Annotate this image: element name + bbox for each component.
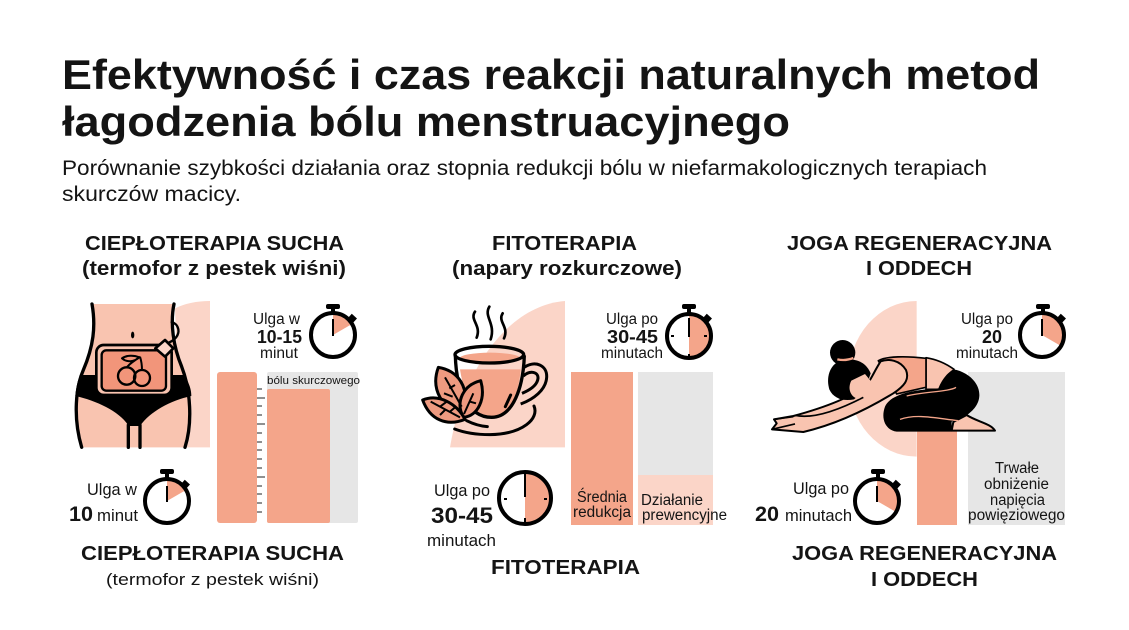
panel: dry heat therapy <box>69 233 360 589</box>
relief label 30-45 minutes lower: 30-45 <box>431 503 493 528</box>
icon: abdomen with cherry-stone heat pad <box>75 301 210 447</box>
relief label 10-15 minutes: minut <box>260 345 299 362</box>
subtitle <box>62 157 987 206</box>
relief label 20 minutes lower: 20 <box>755 503 779 526</box>
bar chart: dry heat pain reduction <box>217 372 360 523</box>
icon: woman in child's pose <box>772 301 995 457</box>
bar chart: yoga tension reduction: obniżenie <box>984 476 1049 493</box>
relief label 30-45 minutes upper: 30-45 <box>607 327 658 347</box>
relief label 20 minutes upper: 20 <box>982 327 1002 347</box>
title: łagodzenia bólu menstruacyjnego <box>62 98 790 145</box>
footer label: phytotherapy: FITOTERAPIA <box>491 557 640 579</box>
subtitle: Porównanie szybkości działania oraz stopnia redukcji bólu w niefarmakologicznych terapiach <box>62 157 987 180</box>
heading: phytotherapy: FITOTERAPIA <box>492 233 637 255</box>
bar chart: phytotherapy reduction and prevention: prewencyjne <box>642 507 727 524</box>
footer label: dry heat therapy: (termofor z pestek wiśni) <box>106 570 319 589</box>
footer label: dry heat therapy: CIEPŁOTERAPIA SUCHA <box>81 543 344 565</box>
relief label 20 minutes lower: minutach <box>785 506 852 525</box>
relief label 10 minutes: minut <box>97 506 138 525</box>
bar chart: phytotherapy reduction and prevention <box>571 372 727 525</box>
relief label 30-45 minutes lower <box>427 481 496 550</box>
bar chart: yoga tension reduction: Trwałe <box>995 460 1039 477</box>
heading: phytotherapy: (napary rozkurczowe) <box>452 258 682 280</box>
relief label 10-15 minutes: 10-15 <box>257 327 302 347</box>
relief label 20 minutes lower: Ulga po <box>793 479 849 498</box>
bar chart: yoga tension reduction: napięcia <box>990 492 1045 509</box>
bar chart: phytotherapy reduction and prevention: redukcja <box>573 504 631 521</box>
relief label 10-15 minutes: Ulga w <box>253 311 301 328</box>
heading: dry heat therapy: CIEPŁOTERAPIA SUCHA <box>85 233 344 255</box>
footer label: restorative yoga: I ODDECH <box>871 569 978 591</box>
relief label 10 minutes: Ulga w <box>87 480 138 499</box>
bar chart: yoga tension reduction: powięziowego <box>968 507 1065 524</box>
relief label 10 minutes: 10 <box>69 503 93 526</box>
heading: restorative yoga <box>787 233 1052 280</box>
relief label 20 minutes upper: minutach <box>956 345 1018 362</box>
footer label: restorative yoga: JOGA REGENERACYJNA <box>792 543 1057 565</box>
relief label 10 minutes <box>69 480 138 526</box>
subtitle: skurczów macicy. <box>62 183 241 206</box>
title: Efektywność i czas reakcji naturalnych metod <box>62 51 1040 98</box>
relief label 30-45 minutes upper: minutach <box>601 345 663 362</box>
bar chart: phytotherapy reduction and prevention: Średnia <box>577 488 627 506</box>
icon: stopwatch 30-45 minutes <box>667 304 712 358</box>
bar chart: phytotherapy reduction and prevention: Działanie <box>641 492 703 509</box>
footer label: dry heat therapy <box>81 543 344 589</box>
relief label 10-15 minutes <box>253 311 302 362</box>
heading: restorative yoga: JOGA REGENERACYJNA <box>787 233 1052 255</box>
relief label 20 minutes upper <box>956 311 1018 362</box>
icon: stopwatch 20 minutes upper <box>1020 304 1066 357</box>
heading: restorative yoga: I ODDECH <box>866 258 972 280</box>
icon: clock 30-45 minutes <box>499 472 551 524</box>
relief label 30-45 minutes upper <box>601 311 663 362</box>
relief label 30-45 minutes upper: Ulga po <box>606 311 658 328</box>
icon: stopwatch 10-15 minutes <box>311 304 357 357</box>
relief label 20 minutes lower <box>755 479 852 526</box>
bar chart: dry heat pain reduction: bólu skurczowego <box>267 375 360 387</box>
title <box>62 51 1040 145</box>
panel: phytotherapy <box>423 233 727 579</box>
icon: stopwatch 20 minutes lower <box>855 469 901 523</box>
bar chart: yoga tension reduction <box>917 372 1065 525</box>
footer label: restorative yoga <box>792 543 1057 591</box>
heading: phytotherapy <box>452 233 682 280</box>
heading: dry heat therapy <box>82 233 346 280</box>
icon: stopwatch 10 minutes <box>145 469 190 523</box>
relief label 20 minutes upper: Ulga po <box>961 311 1013 328</box>
relief label 30-45 minutes lower: Ulga po <box>434 481 490 500</box>
relief label 30-45 minutes lower: minutach <box>427 531 496 550</box>
heading: dry heat therapy: (termofor z pestek wiśni) <box>82 258 346 280</box>
panel: restorative yoga <box>755 233 1066 591</box>
icon: herbal tea cup with leaves <box>423 301 565 447</box>
